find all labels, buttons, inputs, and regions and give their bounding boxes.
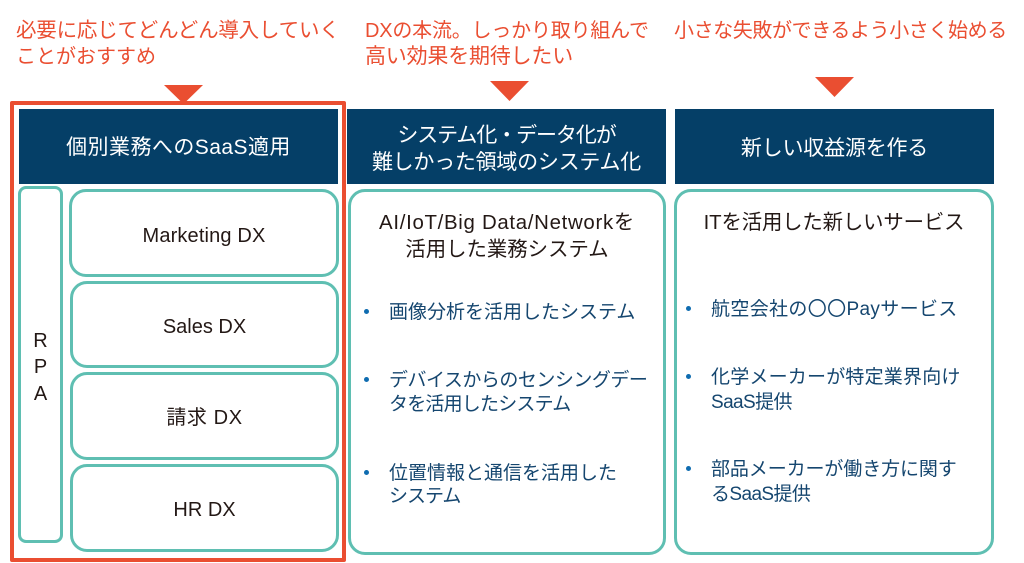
box: Marketing DX <box>69 189 339 277</box>
bullet 1: 画像分析を活用したシステム <box>389 302 635 323</box>
panel heading: AI/IoT/Big Data/Networkを <box>379 212 635 234</box>
box: HR DX <box>70 464 339 552</box>
red caption: column 1 <box>16 18 340 68</box>
heading: column 1 <box>19 109 338 184</box>
box: 請求 DX: 請求 DX <box>166 407 243 429</box>
arrow: column 2 <box>490 81 529 101</box>
bullet 3: 部品メーカーが働き方に関す <box>711 459 957 480</box>
panel heading <box>379 212 635 261</box>
bullet 2 <box>686 366 961 413</box>
bullet 3: 位置情報と通信を活用した <box>389 463 617 484</box>
panel: column 2 <box>348 189 666 555</box>
heading: column 1: 個別業務へのSaaS適用 <box>66 136 291 159</box>
bullet 2: 化学メーカーが特定業界向け <box>711 367 961 388</box>
box: Marketing DX: Marketing DX <box>143 225 265 247</box>
box: 請求 DX <box>70 372 339 460</box>
RPA vertical box: R <box>33 330 48 352</box>
bullet 3 <box>364 463 617 507</box>
bullet 2: タを活用したシステム <box>389 394 570 415</box>
bullet 2: SaaS提供 <box>711 392 792 413</box>
red caption: column 3: 小さな失敗ができるよう小さく始める <box>674 20 1007 42</box>
box: Sales DX: Sales DX <box>163 316 246 338</box>
red caption: column 2: 高い効果を期待したい <box>365 44 573 68</box>
bullet 2 <box>364 370 647 415</box>
heading: column 3 <box>675 109 994 184</box>
RPA vertical box: A <box>34 383 47 405</box>
RPA vertical box: P <box>34 356 47 378</box>
box: Sales DX <box>70 281 339 368</box>
arrow: column 1 <box>164 85 203 101</box>
bullet 3: システム <box>389 486 460 507</box>
red caption: column 1: 必要に応じてどんどん導入していく <box>16 18 340 42</box>
panel: column 3 <box>674 189 994 555</box>
red caption: column 1: ことがおすすめ <box>16 46 156 68</box>
bullet 3: るSaaS提供 <box>711 484 810 505</box>
red caption: column 2: DXの本流。しっかり取り組んで <box>365 20 649 42</box>
panel heading: 活用した業務システム <box>405 239 609 261</box>
heading: column 2: 難しかった領域のシステム化 <box>372 151 641 174</box>
box: HR DX: HR DX <box>173 499 236 521</box>
panel heading: ITを活用した新しいサービス <box>704 212 964 234</box>
heading: column 2 <box>347 109 666 184</box>
bullet 3 <box>686 458 957 505</box>
red highlight frame around column 1 <box>10 101 346 562</box>
bullet 1: 航空会社の〇〇Payサービス <box>711 299 958 320</box>
bullet 2: デバイスからのセンシングデー <box>389 370 647 391</box>
heading: column 2: システム化・データ化が <box>397 124 616 147</box>
red caption: column 2 <box>365 20 649 68</box>
RPA vertical box <box>18 186 63 543</box>
arrow: column 3 <box>815 77 854 97</box>
heading: column 3: 新しい収益源を作る <box>741 137 928 160</box>
